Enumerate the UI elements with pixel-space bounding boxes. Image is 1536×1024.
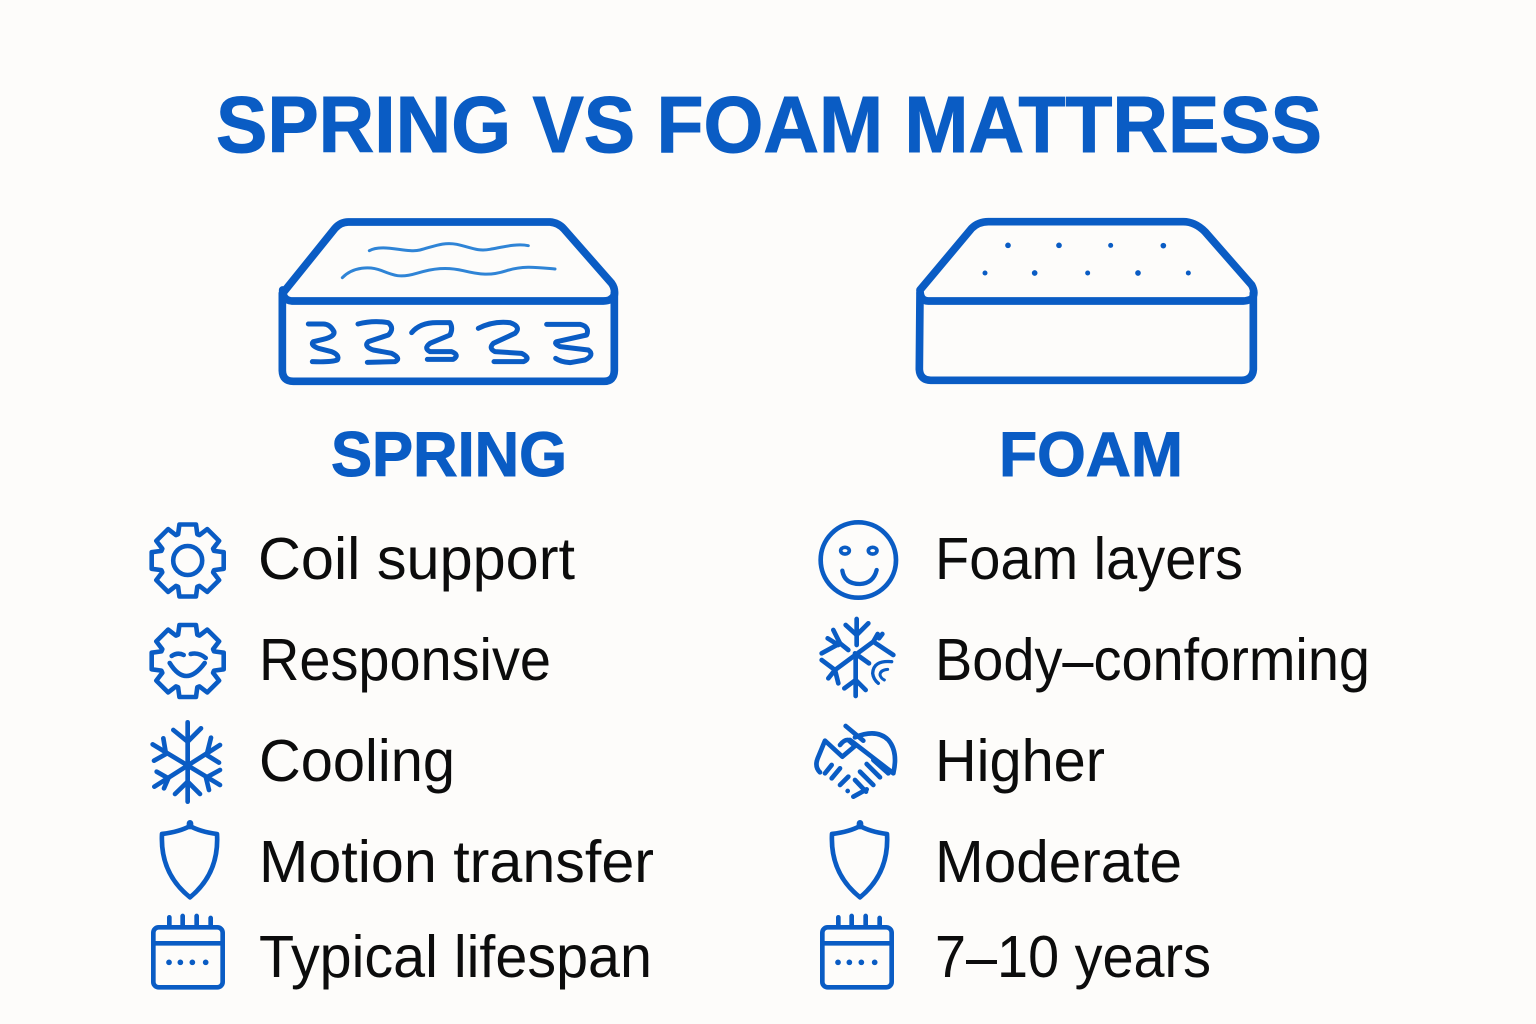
icon: shield: [832, 823, 887, 897]
text: body-conforming: Body–conforming: [935, 627, 1370, 693]
icon: handshake: [816, 726, 895, 797]
text: foam layers: Foam layers: [935, 526, 1243, 592]
text: moderate: Moderate: [935, 829, 1182, 895]
heading: spring: SPRING: [331, 420, 567, 490]
icon: calendar: [822, 916, 892, 987]
icon: spring mattress: [282, 222, 615, 381]
text: coil support: Coil support: [258, 526, 575, 592]
icon: snowflake: [153, 722, 220, 802]
icon: gear: [152, 524, 224, 596]
text: cooling: Cooling: [259, 728, 455, 794]
heading: foam: FOAM: [999, 420, 1183, 490]
icon: calendar: [153, 916, 223, 987]
icon: smiling gear: [152, 625, 224, 697]
text: typical lifespan: Typical lifespan: [259, 924, 652, 990]
text: 7-10 years: 7–10 years: [935, 924, 1211, 990]
icon: foam mattress: [919, 222, 1254, 380]
panel: spring list: [152, 524, 654, 990]
icon: smiley: [821, 522, 896, 598]
icon: shield: [162, 823, 217, 897]
panel: foam list: [816, 522, 1370, 990]
icon: snowflake with curl: [822, 619, 893, 696]
text: responsive: Responsive: [259, 627, 551, 693]
text: higher: Higher: [935, 728, 1105, 794]
title: SPRING VS FOAM MATTRESS: [216, 80, 1322, 169]
text: motion transfer: Motion transfer: [259, 829, 654, 895]
